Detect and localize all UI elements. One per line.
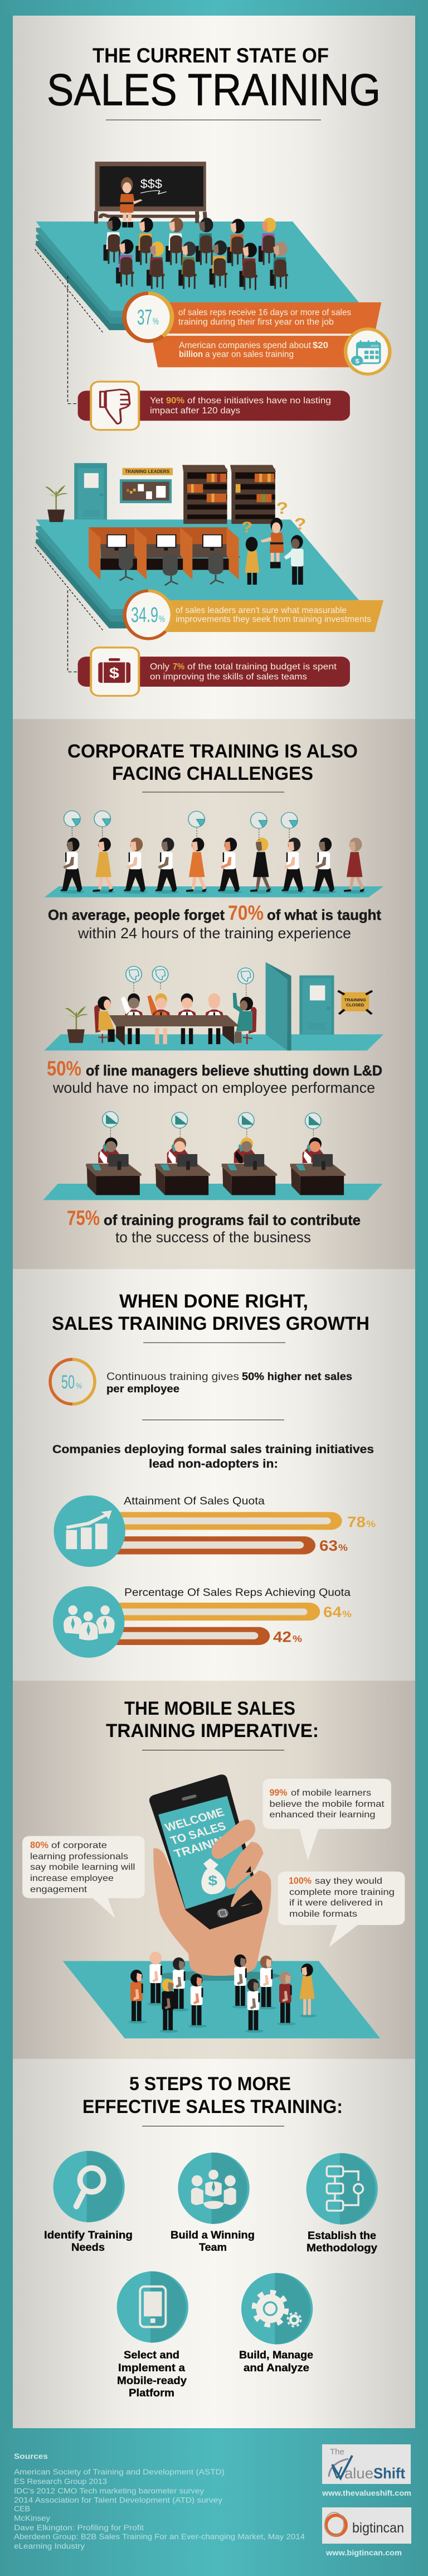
- statement: 75 percent of programs fail: to the success of the business: [115, 1229, 311, 1246]
- phone: TO SALES: [168, 1820, 228, 1847]
- heading: [82, 2073, 343, 2117]
- walking people illustration: [44, 811, 383, 898]
- stat: 50 percent higher net sales: [50, 1359, 352, 1404]
- callout: 7 percent of budget: Only: [150, 662, 169, 672]
- office illustration: [35, 463, 359, 672]
- bubble: 100 percent: mobile formats: [289, 1909, 357, 1919]
- bubble: 99 percent: enhanced their learning: [270, 1810, 376, 1820]
- statement: 70 percent forget: of what is taught: [267, 906, 381, 923]
- banner: 37 percent: American companies spend about: [179, 341, 312, 350]
- subheading: lead non-adopters in:: [149, 1458, 278, 1470]
- logo: the value shift: V: [332, 2463, 343, 2482]
- callout: 90 percent no lasting impact: Yet: [150, 396, 164, 406]
- logo: the value shift: alue: [344, 2465, 373, 2482]
- banner: 37 percent: a year on sales training: [205, 350, 294, 359]
- panel: current state of sales training: [13, 16, 415, 719]
- heading: EFFECTIVE SALES TRAINING:: [82, 2096, 343, 2117]
- ring: 50 percent: %: [76, 1381, 82, 1390]
- bubble: 80 percent: learning professionals: [30, 1852, 128, 1861]
- bubble: 100 percent: say they would: [315, 1876, 382, 1886]
- banner: 37 percent: %: [153, 316, 159, 327]
- step 2: build a winning team: Build a Winning: [171, 2230, 255, 2241]
- confused leaders: ?: [294, 515, 307, 533]
- banner: 34.9 percent: [124, 591, 383, 639]
- sources: Sources: [14, 2452, 48, 2461]
- step 3: establish the methodology: [307, 2153, 378, 2254]
- chart: percentage of reps achieving quota: 64: [323, 1604, 342, 1620]
- door: [74, 463, 107, 519]
- banner: 34.9 percent: improvements they seek from training investments: [176, 615, 371, 624]
- heading: [67, 741, 358, 784]
- ring: 50 percent: 50: [61, 1372, 75, 1393]
- heading: [106, 1698, 319, 1742]
- chart: percentage of reps achieving quota: 42: [273, 1629, 291, 1646]
- stat: 50 percent higher net sales: Continuous training gives: [106, 1371, 239, 1383]
- heading: SALES TRAINING DRIVES GROWTH: [52, 1313, 369, 1334]
- hand holding phone and crowd: [63, 1774, 380, 2038]
- title: [47, 44, 381, 115]
- panel: mobile sales training: [13, 1681, 415, 2059]
- ring: 50 percent: [50, 1359, 95, 1404]
- banner: 34.9 percent: %: [159, 614, 165, 624]
- callout: 90 percent no lasting impact: [78, 382, 350, 430]
- icon: gears: [254, 2292, 301, 2326]
- icon: money case: [98, 658, 130, 683]
- falling chart bubbles: [103, 1112, 321, 1138]
- heading: CORPORATE TRAINING IS ALSO: [67, 741, 358, 762]
- bubble: 80 percent: [22, 1836, 145, 1918]
- plant: [65, 1006, 88, 1043]
- icon: calendar: [351, 340, 380, 366]
- panel: five steps: [13, 2059, 415, 2428]
- bookshelves: [182, 465, 276, 524]
- panel: when done right: [13, 1269, 415, 1681]
- teacher: [120, 177, 143, 228]
- floor: [63, 1961, 380, 2038]
- chart: percentage of reps achieving quota: %: [342, 1609, 352, 1619]
- step 1: identify training needs: Needs: [71, 2242, 105, 2254]
- title: THE CURRENT STATE OF: [93, 44, 329, 67]
- chart: attainment of sales quota: %: [338, 1542, 348, 1553]
- icon: calendar: $: [355, 358, 359, 365]
- confused leaders: ?: [241, 519, 252, 536]
- step 1: identify training needs: [44, 2151, 133, 2254]
- callout: 90 percent no lasting impact: impact after 120 days: [150, 406, 240, 416]
- fingers: [212, 1820, 271, 1907]
- sources: Aberdeen Group: B2B Sales Training For an Ever-changing Market, May 2014: [14, 2532, 305, 2541]
- logo: the value shift: [322, 2444, 411, 2484]
- sign: training closed: TRAINING: [344, 998, 366, 1002]
- statement: 70 percent forget: within 24 hours of the training experience: [77, 925, 351, 942]
- sources: American Society of Training and Development (ASTD): [14, 2468, 225, 2476]
- logo: the value shift: The: [330, 2447, 344, 2457]
- sources: McKinsey: [14, 2514, 50, 2522]
- logo: the value shift: Shift: [373, 2465, 405, 2482]
- statement: 50 percent of line managers: 50%: [47, 1057, 81, 1080]
- chart: percentage of reps achieving quota: Percentage Of Sales Reps Achieving Quota: [124, 1587, 351, 1599]
- desks illustration: [43, 1112, 383, 1200]
- url: value shift: www.thevalueshift.com: [322, 2489, 411, 2497]
- step 4: select and implement platform: Mobile-ready: [117, 2375, 187, 2387]
- panel: corporate training challenges: [13, 719, 415, 1269]
- bubble: 80 percent: 80%: [30, 1840, 48, 1850]
- sources: 2014 Association for Talent Development (ATD) survey: [14, 2496, 222, 2505]
- sources: [14, 2452, 305, 2550]
- sources: eLearning Industry: [14, 2542, 85, 2550]
- statement: 70 percent forget: [48, 901, 381, 942]
- chart: attainment of sales quota: Attainment Of Sales Quota: [124, 1496, 265, 1507]
- cubicles: [89, 527, 240, 585]
- chart: attainment of sales quota: 78: [347, 1514, 366, 1531]
- pin board: [120, 479, 172, 503]
- icon: money bag: [201, 1858, 225, 1894]
- subheading: Companies deploying formal sales training initiatives: [52, 1443, 374, 1456]
- bubble: 100 percent: 100%: [289, 1875, 312, 1886]
- logo: bigtincan: [322, 2507, 411, 2544]
- icon: rising bars: [66, 1511, 112, 1549]
- banner: 37 percent: [124, 293, 390, 374]
- heading: FACING CHALLENGES: [112, 763, 313, 784]
- chart: percentage of reps achieving quota: %: [293, 1633, 302, 1644]
- bubble: 80 percent: increase employee: [30, 1874, 114, 1883]
- bubble: 99 percent: [263, 1779, 391, 1860]
- statement: 50 percent of line managers: of line managers believe shutting down L&D: [86, 1062, 382, 1079]
- step 5: build manage analyze: and Analyze: [244, 2362, 309, 2374]
- sources: IDC's 2012 CMO Tech marketing barometer survey: [14, 2487, 204, 2495]
- chart: attainment of sales quota: %: [366, 1518, 376, 1530]
- banner: 37 percent: 37: [137, 306, 152, 329]
- chart: attainment of sales quota: [54, 1496, 376, 1567]
- banner: 37 percent: $20: [313, 341, 328, 350]
- statement: 75 percent of programs fail: 75%: [67, 1207, 100, 1229]
- statement: 70 percent forget: On average, people forget: [48, 906, 225, 923]
- banner: 37 percent: training during their first year on the job: [178, 317, 334, 327]
- step 4: select and implement platform: Implement a: [118, 2362, 185, 2374]
- hand palm: [153, 1848, 271, 1976]
- sources: Dave Elkington: Profiling for Profit: [14, 2524, 144, 2532]
- banner: 34.9 percent: 34.9: [131, 604, 158, 627]
- sources: ES Research Group 2013: [14, 2477, 107, 2486]
- confused leaders: [241, 499, 307, 585]
- stat: 50 percent higher net sales: 50% higher net sales: [242, 1371, 352, 1383]
- statement: 75 percent of programs fail: [67, 1207, 361, 1246]
- callout: 90 percent no lasting impact: 90%: [166, 396, 184, 406]
- statement: 70 percent forget: 70%: [228, 901, 264, 924]
- sign: training closed: [338, 991, 372, 1014]
- chart: attainment of sales quota: 63: [319, 1537, 338, 1554]
- bubble: 80 percent: say mobile learning will: [30, 1863, 135, 1872]
- sign: training leaders: TRAINING LEADERS: [125, 469, 169, 474]
- icon: phone: [140, 2286, 166, 2327]
- dashed connector: classroom to callout: [67, 276, 78, 404]
- callout: 7 percent of budget: [78, 648, 350, 696]
- clock bubbles: [64, 811, 298, 828]
- students: [104, 216, 288, 290]
- icon: calendar: 2015: [371, 345, 379, 348]
- plant: [45, 485, 67, 522]
- bubble: 100 percent: [278, 1871, 405, 1947]
- statement: 50 percent of line managers: [47, 1057, 382, 1096]
- bubble: 99 percent: 99%: [270, 1787, 288, 1798]
- sign: training closed: CLOSED: [346, 1003, 364, 1007]
- callout: 7 percent of budget: of the total training budget is spent: [187, 662, 337, 672]
- confused leaders: ?: [276, 499, 288, 517]
- bubble: 100 percent: complete more training: [289, 1888, 395, 1897]
- banner: 37 percent: billion: [179, 350, 203, 359]
- step 2: build a winning team: [171, 2153, 255, 2254]
- phone: TRAINING: [172, 1832, 235, 1860]
- chart: percentage of reps achieving quota: [53, 1586, 352, 1658]
- crowd: [128, 1952, 317, 2033]
- meeting room illustration: [44, 962, 383, 1050]
- open door: [266, 962, 334, 1050]
- panel: footer: [0, 2428, 428, 2576]
- heading: 5 STEPS TO MORE: [129, 2073, 291, 2095]
- heading: TRAINING IMPERATIVE:: [106, 1720, 319, 1742]
- step 2: build a winning team: Team: [199, 2242, 227, 2254]
- step 1: identify training needs: Identify Training: [44, 2230, 133, 2241]
- banner: 37 percent: of sales reps receive 16 days or more of sales: [178, 308, 351, 317]
- url: bigtincan: www.bigtincan.com: [325, 2549, 402, 2557]
- step 4: select and implement platform: Select and: [124, 2350, 179, 2361]
- step 4: select and implement platform: [117, 2271, 188, 2399]
- icon: flow chart: [327, 2167, 363, 2211]
- subheading: [52, 1443, 374, 1470]
- bubble: 80 percent: of corporate: [51, 1841, 107, 1850]
- statement: 75 percent of programs fail: of training programs fail to contribute: [104, 1212, 361, 1228]
- step 4: select and implement platform: Platform: [129, 2387, 174, 2399]
- title: SALES TRAINING: [47, 65, 381, 115]
- callout: 90 percent no lasting impact: of those initiatives have no lasting: [187, 396, 331, 406]
- classroom illustration: $$$: [140, 177, 162, 191]
- bubble: 99 percent: believe the mobile format: [270, 1800, 385, 1809]
- thumbs down bubbles: [126, 966, 254, 997]
- icon: team: [191, 2170, 236, 2209]
- banner: 34.9 percent: of sales leaders aren't sure what measurable: [176, 606, 347, 615]
- phone: [149, 1774, 262, 1929]
- heading: [52, 1291, 369, 1334]
- step 3: establish the methodology: Methodology: [307, 2242, 377, 2254]
- phone: WELCOME: [163, 1806, 226, 1834]
- icon: money case: $: [109, 665, 119, 682]
- icon: magnifier: [76, 2168, 104, 2206]
- icon: team: [64, 1605, 115, 1641]
- classroom illustration: [35, 162, 359, 334]
- step 5: build manage analyze: Build, Manage: [239, 2350, 313, 2361]
- callout: 7 percent of budget: 7%: [173, 662, 184, 672]
- icon: money bag: $: [208, 1873, 218, 1888]
- meeting participants and table: [94, 993, 256, 1046]
- bubble: 100 percent: if it were delivered in: [289, 1898, 383, 1908]
- heading: WHEN DONE RIGHT,: [119, 1291, 308, 1312]
- sources: CEB: [14, 2505, 30, 2513]
- bubble: 80 percent: engagement: [30, 1885, 87, 1894]
- icon: thumbs down: [100, 389, 130, 423]
- statement: 50 percent of line managers: would have no impact on employee performance: [52, 1079, 375, 1096]
- logo: bigtincan: bigtincan: [352, 2520, 404, 2536]
- stat: 50 percent higher net sales: per employee: [106, 1383, 179, 1395]
- bubble: 99 percent: of mobile learners: [291, 1788, 371, 1798]
- callout: 7 percent of budget: on improving the skills of sales teams: [150, 672, 307, 682]
- heading: THE MOBILE SALES: [124, 1698, 295, 1719]
- step 5: build manage analyze: [239, 2273, 313, 2374]
- sign: training leaders: [122, 468, 173, 475]
- step 3: establish the methodology: Establish the: [308, 2230, 376, 2242]
